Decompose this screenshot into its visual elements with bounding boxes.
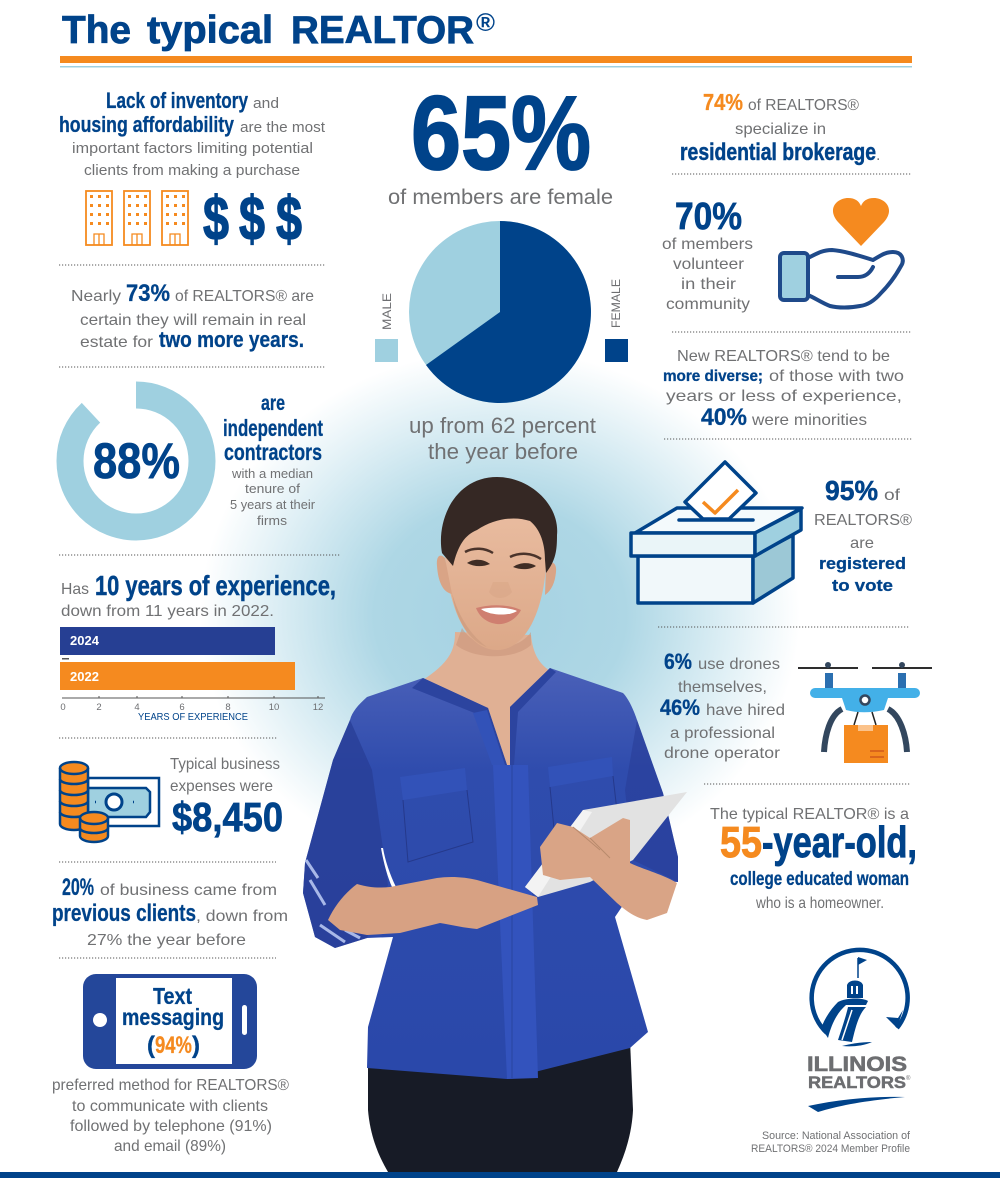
pie chart: gender: MALE xyxy=(380,293,394,330)
text: preferred method: and email (89%) xyxy=(114,1138,226,1155)
text: residential brokerage: . xyxy=(876,147,880,164)
logo: Illinois Realtors: REALTORS xyxy=(808,1073,906,1092)
pie chart: gender: FEMALE xyxy=(609,279,623,328)
text: previous clients: , down from xyxy=(196,908,288,925)
text: 55-year-old summary: The typical REALTOR® is a xyxy=(710,806,909,823)
text: independent contractors: are xyxy=(261,392,285,415)
photo: woman with tablet xyxy=(303,477,687,1172)
bar chart: years of experience: 4 xyxy=(134,702,140,713)
text: preferred method xyxy=(52,1077,289,1155)
icon: phone with text messaging: ( xyxy=(147,1032,155,1059)
text: 55-year-old summary: 55 xyxy=(720,818,762,867)
text: up from 62 percent xyxy=(409,413,596,464)
text: business expenses: Typical business xyxy=(170,756,280,773)
title: The xyxy=(62,9,131,52)
text: residential brokerage: of REALTORS® xyxy=(748,97,859,114)
icon: dollar signs xyxy=(203,185,302,254)
text: registered to vote: of xyxy=(884,487,901,504)
text: previous clients: of business came from xyxy=(100,882,277,899)
text: remain in real estate xyxy=(71,280,314,352)
text: registered to vote: REALTORS® xyxy=(814,512,912,529)
icon: money and coins xyxy=(60,762,159,842)
text: inventory and affordability: and xyxy=(253,95,279,112)
icon: phone with text messaging: Text xyxy=(153,983,192,1009)
text: inventory and affordability: important factors limiting potential xyxy=(72,140,313,157)
bar chart: years of experience xyxy=(60,627,325,723)
text: 55-year-old summary: college educated woman xyxy=(730,869,909,890)
icon: delivery drone xyxy=(798,662,932,763)
text: more diverse: more diverse; xyxy=(663,368,763,385)
icon: ballot box xyxy=(631,462,802,603)
title: typical xyxy=(147,9,273,52)
text: independent contractors: 5 years at their xyxy=(230,497,316,512)
text: remain in real estate: certain they will remain in real xyxy=(80,312,306,329)
text: registered to vote: are xyxy=(850,535,874,552)
text: 70% volunteer: community xyxy=(666,296,750,313)
text: more diverse: New REALTORS® tend to be xyxy=(677,348,890,365)
icon: phone with text messaging: messaging xyxy=(122,1004,224,1030)
text: residential brokerage: specialize in xyxy=(735,121,826,138)
text: independent contractors: with a median xyxy=(231,466,313,481)
bar chart: years of experience: 0 xyxy=(60,702,66,713)
text: independent contractors: firms xyxy=(257,513,288,528)
text: inventory and affordability: are the most xyxy=(240,119,326,136)
text: inventory and affordability: housing affordability xyxy=(59,112,235,137)
bar chart: years of experience: YEARS OF EXPERIENCE xyxy=(138,712,248,723)
text: drones xyxy=(660,649,785,762)
text: previous clients: previous clients xyxy=(52,900,196,927)
text: inventory and affordability: Lack of inventory xyxy=(106,88,249,113)
footer bar xyxy=(0,1172,1000,1178)
text: up from 62 percent: up from 62 percent xyxy=(409,413,596,438)
source note xyxy=(751,1130,911,1155)
text: registered to vote: registered xyxy=(819,554,906,573)
icon: dollar signs: $ xyxy=(203,185,229,254)
donut chart: 88% xyxy=(70,395,202,527)
source note: Source: National Association of xyxy=(762,1130,911,1142)
text: independent contractors: contractors xyxy=(224,439,322,465)
text: more diverse: of those with two xyxy=(769,368,904,385)
text: preferred method: to communicate with clients xyxy=(72,1098,268,1115)
bar chart: years of experience: 6 xyxy=(179,702,185,713)
text: independent contractors: tenure of xyxy=(245,481,300,496)
icon: heart in hand xyxy=(780,198,903,308)
text: preferred method: preferred method for REALTORS® xyxy=(52,1077,289,1094)
text: drones: use drones xyxy=(698,656,780,673)
donut chart: 88%: 88% xyxy=(93,433,180,489)
bar chart: years of experience: 2022 xyxy=(70,669,99,684)
text: remain in real estate: estate for xyxy=(80,334,154,351)
text: more diverse: years or less of experience, xyxy=(666,388,902,405)
text: years of experience xyxy=(61,570,336,620)
text: residential brokerage xyxy=(680,89,880,166)
title: ® xyxy=(476,9,496,37)
icon: dollar signs: $ xyxy=(239,185,265,254)
text: 55-year-old summary xyxy=(710,806,917,912)
bar chart: years of experience: 8 xyxy=(225,702,231,713)
text: remain in real estate: two more years. xyxy=(159,327,304,352)
logo: Illinois Realtors: ® xyxy=(906,1075,911,1082)
text: residential brokerage: 74% xyxy=(703,89,743,115)
bar chart: years of experience: 2024 xyxy=(70,633,100,648)
text: registered to vote: to vote xyxy=(832,576,893,595)
text: drones: drone operator xyxy=(664,745,781,762)
big stat: 65% female: of members are female xyxy=(388,186,613,209)
logo: Illinois Realtors xyxy=(807,950,911,1112)
text: drones: 46% xyxy=(660,695,700,720)
icon: phone with text messaging: ) xyxy=(192,1032,200,1059)
icon: phone with text messaging: 94% xyxy=(155,1032,192,1059)
text: preferred method: followed by telephone (91%) xyxy=(70,1118,272,1135)
text: 70% volunteer xyxy=(662,196,753,313)
icon: dollar signs: $ xyxy=(276,185,302,254)
big stat: 65% female: 65% xyxy=(411,75,591,192)
text: years of experience: down from 11 years in 2022. xyxy=(61,603,274,620)
text: residential brokerage: residential brokerage xyxy=(680,139,876,166)
text: drones: themselves, xyxy=(678,679,767,696)
text: business expenses: $8,450 xyxy=(172,794,283,840)
text: drones: a professional xyxy=(670,725,775,742)
text: remain in real estate: 73% xyxy=(126,280,170,307)
text: 70% volunteer: of members xyxy=(662,236,753,253)
text: 70% volunteer: volunteer xyxy=(673,256,745,273)
text: more diverse: 40% xyxy=(701,404,747,431)
text: 55-year-old summary: -year-old, xyxy=(762,818,917,867)
icon: phone with text messaging xyxy=(83,974,257,1069)
text: more diverse: were minorities xyxy=(751,412,867,429)
bar chart: years of experience: 10 xyxy=(269,702,279,713)
text: inventory and affordability xyxy=(59,88,326,179)
icon: buildings xyxy=(86,191,188,245)
bar chart: years of experience: 12 xyxy=(313,702,323,713)
bar chart: years of experience: 2 xyxy=(96,702,102,713)
text: independent contractors: independent xyxy=(223,415,323,441)
text: registered to vote: 95% xyxy=(825,475,878,506)
text: independent contractors xyxy=(223,392,323,528)
title xyxy=(62,9,496,52)
text: years of experience: 10 years of experience, xyxy=(95,570,336,601)
text: years of experience: Has xyxy=(61,581,89,598)
text: 70% volunteer: in their xyxy=(681,276,737,293)
text: drones: have hired xyxy=(706,702,785,719)
text: registered to vote xyxy=(814,475,912,595)
text: remain in real estate: of REALTORS® are xyxy=(175,288,314,305)
pie chart: gender xyxy=(375,221,628,403)
text: remain in real estate: Nearly xyxy=(71,288,121,305)
title rule xyxy=(60,56,912,68)
text: 70% volunteer: 70% xyxy=(675,196,742,238)
text: previous clients xyxy=(52,874,288,949)
text: business expenses xyxy=(170,756,283,840)
text: previous clients: 27% the year before xyxy=(87,932,246,949)
text: previous clients: 20% xyxy=(62,874,94,901)
text: 55-year-old summary: who is a homeowner. xyxy=(755,895,884,912)
logo: Illinois Realtors: ILLINOIS xyxy=(807,1053,907,1076)
text: business expenses: expenses were xyxy=(170,778,273,795)
source note: REALTORS® 2024 Member Profile xyxy=(751,1143,910,1155)
text: more diverse xyxy=(663,348,904,431)
title: REALTOR xyxy=(291,9,474,52)
text: up from 62 percent: the year before xyxy=(428,439,578,464)
text: drones: 6% xyxy=(664,649,692,674)
text: inventory and affordability: clients from making a purchase xyxy=(84,162,300,179)
